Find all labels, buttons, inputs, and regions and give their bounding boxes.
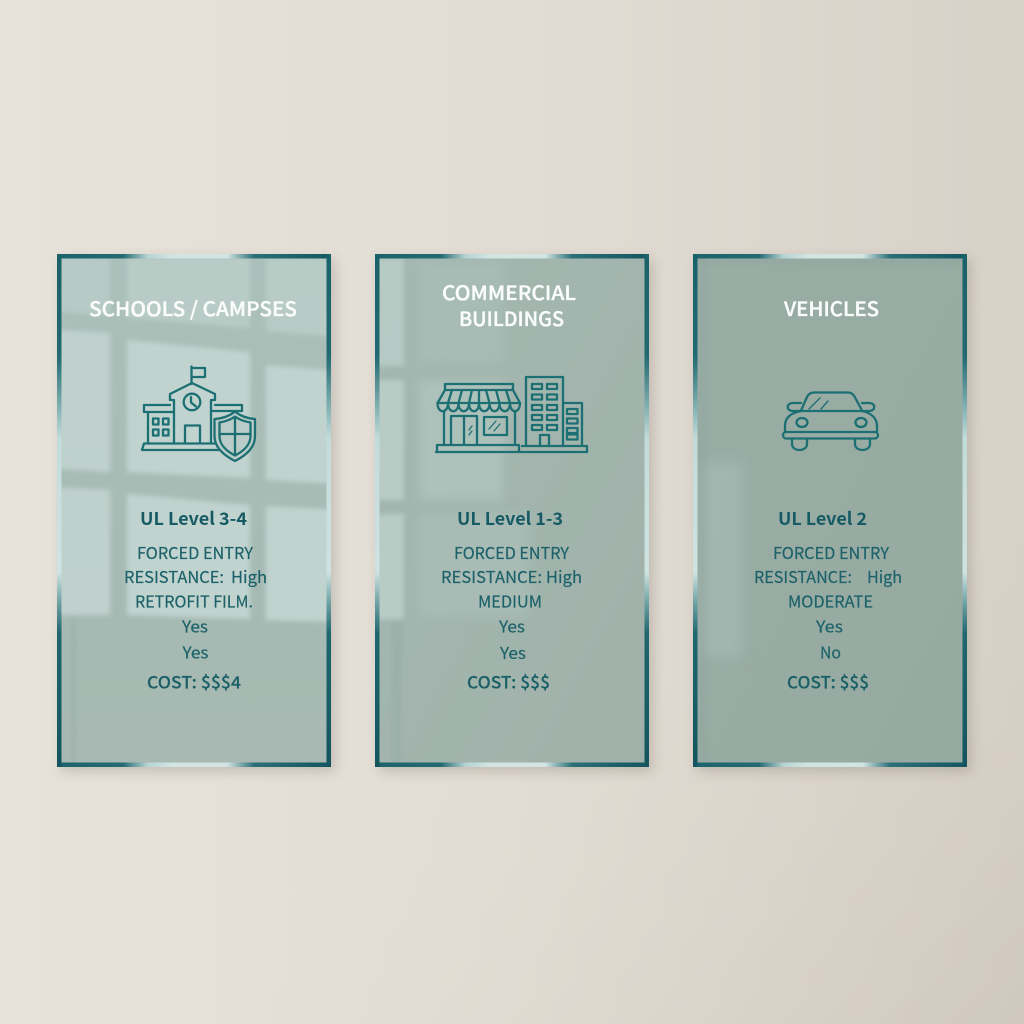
heading: schools / campuses: SCHOOLS / CAMPSES [89, 293, 297, 322]
text block: commercial specifications: RESISTANCE: High [441, 564, 582, 588]
text block: commercial specifications [441, 506, 582, 694]
text block: school specifications: High [231, 564, 267, 588]
text block: school specifications: FORCED ENTRY [137, 540, 253, 564]
text block: school specifications: RESISTANCE: [124, 564, 224, 588]
text block: commercial specifications: FORCED ENTRY [454, 540, 569, 564]
heading: commercial buildings: COMMERCIAL [442, 277, 576, 306]
heading: commercial buildings [442, 277, 576, 332]
text block: commercial specifications: MEDIUM [478, 588, 542, 612]
heading: commercial buildings: BUILDINGS [459, 303, 564, 332]
panel: vehicles [693, 254, 971, 772]
text block: school specifications: Yes [181, 640, 209, 664]
text block: vehicle specifications: UL Level 2 [778, 506, 867, 531]
icon: school with shield [142, 366, 255, 461]
text block: vehicle specifications: High [867, 564, 902, 588]
text block: vehicle specifications: MODERATE [788, 588, 873, 612]
text block: vehicle specifications: FORCED ENTRY [773, 540, 889, 564]
text block: school specifications: RETROFIT FILM. [135, 588, 253, 612]
text block: school specifications [124, 506, 267, 694]
text block: commercial specifications: Yes [498, 614, 525, 638]
text block: commercial specifications: COST: $$$ [467, 668, 550, 694]
text block: vehicle specifications: Yes [815, 614, 843, 638]
text block: commercial specifications: Yes [499, 640, 526, 664]
text block: school specifications: COST: $$$4 [147, 668, 241, 694]
heading: vehicles: VEHICLES [783, 293, 879, 322]
text block: commercial specifications: UL Level 1-3 [457, 506, 563, 531]
panel: schools / campuses [50, 254, 340, 772]
text block: vehicle specifications [754, 506, 902, 694]
text block: school specifications: UL Level 3-4 [140, 506, 247, 531]
text block: vehicle specifications: RESISTANCE: [754, 564, 852, 588]
panel: commercial buildings [370, 254, 653, 772]
text block: school specifications: Yes [181, 614, 208, 638]
text block: vehicle specifications: No [820, 640, 841, 664]
icon: storefront and office buildings [436, 377, 587, 452]
text block: vehicle specifications: COST: $$$ [787, 668, 869, 694]
icon: car front view [783, 392, 878, 450]
